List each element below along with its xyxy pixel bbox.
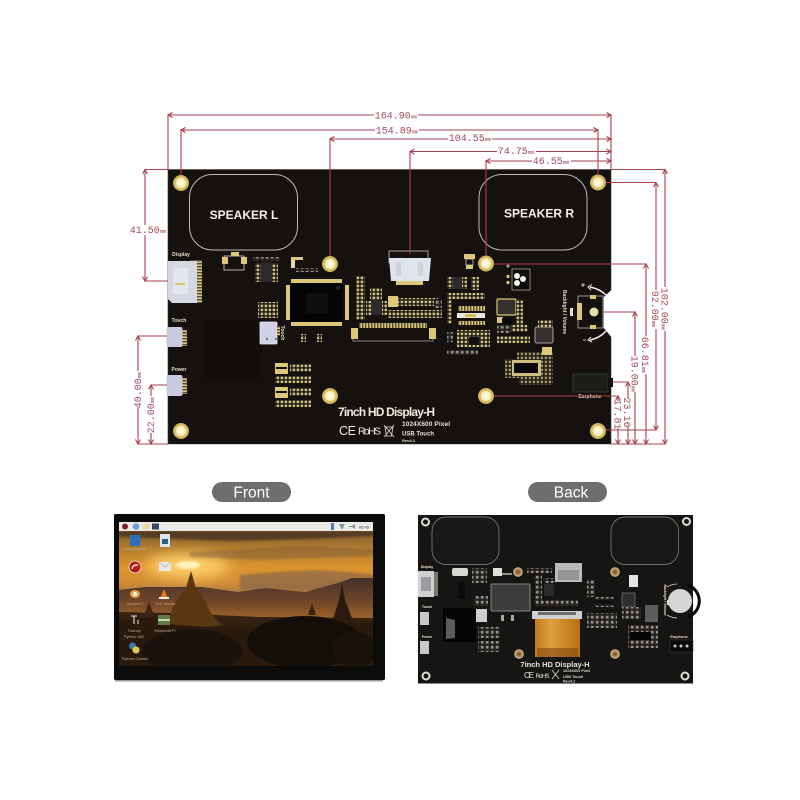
dimension: 154.89mm: 154.89mm bbox=[376, 126, 419, 138]
dimension: 104.55mm: 104.55mm bbox=[449, 134, 492, 145]
dimension: 164.90mm bbox=[168, 110, 611, 169]
left surface-mount components bbox=[222, 252, 322, 342]
center touch USB port: Touch bbox=[279, 326, 285, 340]
resolution specification text: Rev4.2 bbox=[402, 438, 416, 443]
dimension: 41.50mm: 41.50mm bbox=[130, 226, 167, 237]
front label pill bbox=[212, 482, 291, 502]
display HDMI connector bbox=[168, 252, 202, 303]
back knob: Backlight / Volume bbox=[663, 584, 667, 616]
resolution specification text: 1024X600 Pixel bbox=[402, 421, 450, 428]
back ports left: Power bbox=[422, 635, 433, 639]
dimension: 23.16mm: 23.16 bbox=[620, 397, 631, 428]
speaker L outline: SPEAKER L bbox=[210, 208, 278, 222]
touch micro USB port: Touch bbox=[172, 318, 186, 324]
shaded board area bbox=[206, 320, 262, 382]
display HDMI connector: Display bbox=[172, 252, 190, 258]
dimension: 102.00mm bbox=[611, 170, 670, 444]
wallpaper sunset photo bbox=[119, 531, 373, 666]
dimension: 19.00mm bbox=[604, 312, 640, 444]
center component rows bbox=[356, 276, 442, 320]
back specification text: 1024X600 Pixel bbox=[563, 669, 590, 673]
back mini HDMI bbox=[555, 563, 582, 582]
dimension: 40.00mm: 40.00mm bbox=[134, 371, 145, 408]
bottom edge highlight bbox=[115, 680, 383, 682]
back ports left: Touch bbox=[422, 605, 432, 609]
back opening window bbox=[443, 608, 476, 642]
resolution specification text bbox=[402, 421, 450, 443]
back speaker right bbox=[611, 517, 678, 564]
dimension: 92.00mm bbox=[606, 182, 661, 430]
back board bbox=[418, 515, 693, 684]
back specification text bbox=[563, 669, 590, 684]
dimension: 23.16mm bbox=[613, 382, 633, 444]
desktop icons: Python IDE bbox=[124, 634, 144, 639]
dimension: 19.00mm: 19.00 mm bbox=[628, 356, 638, 393]
back upper left components bbox=[452, 568, 552, 599]
certification marks: CE bbox=[339, 424, 356, 438]
dimension: 17.81mm: 17.81 bbox=[610, 399, 622, 430]
touch micro USB port bbox=[166, 318, 187, 347]
back label pill: Back bbox=[554, 484, 588, 502]
dimension: 22.00mm: 22.00mm bbox=[147, 396, 158, 433]
dimension: 46.55mm: 46.55mm bbox=[533, 157, 570, 168]
back QFP chip bbox=[491, 584, 530, 611]
dimension: 92.00mm: 92.00 mm bbox=[648, 291, 659, 328]
back knob bbox=[663, 584, 699, 618]
backlight and volume potentiometer bbox=[561, 283, 606, 342]
speaker R outline: SPEAKER R bbox=[504, 206, 574, 220]
back earphone jack: Earphone bbox=[670, 635, 688, 639]
speaker R outline bbox=[479, 174, 587, 250]
dimension: 74.75mm: 74.75mm bbox=[498, 147, 535, 158]
backlight and volume potentiometer: Backlight / Volume bbox=[561, 290, 567, 334]
lower right component cluster bbox=[505, 347, 553, 385]
desktop icons bbox=[122, 534, 176, 661]
display bezel bbox=[114, 514, 385, 680]
dimension lines bbox=[130, 110, 670, 444]
desktop icons: VLC Media bbox=[155, 601, 176, 606]
back standoffs bbox=[513, 567, 620, 659]
model title text: 7inch HD Display-H bbox=[338, 405, 435, 419]
dimension: 104.55mm bbox=[330, 133, 611, 256]
back certification marks bbox=[524, 670, 559, 680]
back specification text: USB Touch bbox=[563, 675, 584, 679]
dimension: 74.75mm bbox=[410, 146, 611, 254]
back label pill bbox=[528, 482, 607, 502]
back speaker left bbox=[432, 517, 499, 564]
dimension: 164.90mm: 164.90mm bbox=[375, 112, 418, 122]
back ports left bbox=[418, 565, 438, 654]
resolution specification text: USB Touch bbox=[402, 432, 434, 438]
certification marks: RoHS bbox=[358, 426, 381, 438]
panel: back view of display bbox=[418, 515, 699, 684]
dimension: 40.00mm bbox=[132, 336, 168, 444]
earphone jack: Earphone bbox=[578, 394, 602, 400]
white triple-dot component bbox=[506, 264, 530, 290]
speaker L outline bbox=[190, 174, 298, 250]
PCB board outline bbox=[168, 170, 611, 444]
front label pill: Front bbox=[233, 484, 270, 502]
power micro USB port: Power bbox=[171, 367, 187, 373]
dimension: 46.55mm bbox=[486, 156, 611, 255]
main QFP chip bbox=[286, 279, 349, 326]
back specification text: Rev4.2 bbox=[563, 680, 575, 684]
dimension: 17.81mm bbox=[494, 396, 623, 444]
certification marks bbox=[339, 424, 394, 438]
back earphone jack bbox=[670, 635, 693, 652]
dimension: 41.50mm bbox=[130, 170, 168, 281]
dimension: 22.00mm bbox=[145, 385, 167, 444]
dimension: 66.81mm: 66.81 mm bbox=[638, 337, 649, 374]
desktop icons: Minecraft Pi bbox=[154, 628, 176, 633]
back mid components bbox=[474, 575, 578, 652]
back certification marks: RoHS bbox=[536, 674, 550, 680]
FPC connector footprint bbox=[351, 323, 436, 341]
dimension: 154.89mm bbox=[181, 125, 598, 175]
power inductors and components bbox=[497, 299, 553, 343]
panel: front view of display bbox=[114, 514, 385, 682]
earphone jack bbox=[573, 374, 613, 400]
desktop icons: Python Games bbox=[122, 656, 148, 661]
FPC ribbon cable bbox=[532, 611, 582, 657]
desktop icons: Wastebasket bbox=[124, 546, 147, 551]
dimension: 66.81mm bbox=[494, 264, 651, 444]
back right components bbox=[587, 575, 658, 648]
mini HDMI connector bbox=[389, 251, 431, 285]
center touch USB port bbox=[260, 322, 285, 344]
taskbar: 06:45 bbox=[359, 524, 370, 530]
lower left component clusters bbox=[275, 363, 311, 407]
desktop icons: Thonny bbox=[127, 628, 141, 633]
power micro USB port bbox=[166, 367, 187, 396]
back corner holes bbox=[422, 518, 690, 680]
desktop icons: Scratch 2 bbox=[127, 601, 144, 606]
dimension: 102.00mm: 102.00 mm bbox=[658, 288, 668, 331]
back ports left: Display bbox=[421, 565, 433, 569]
mounting holes bbox=[173, 174, 606, 439]
back model title: 7inch HD Display-H bbox=[520, 660, 590, 669]
right of center component group bbox=[447, 254, 490, 355]
taskbar bbox=[119, 522, 373, 531]
back certification marks: CE bbox=[524, 671, 534, 680]
panel: main PCB back view bbox=[166, 170, 613, 444]
